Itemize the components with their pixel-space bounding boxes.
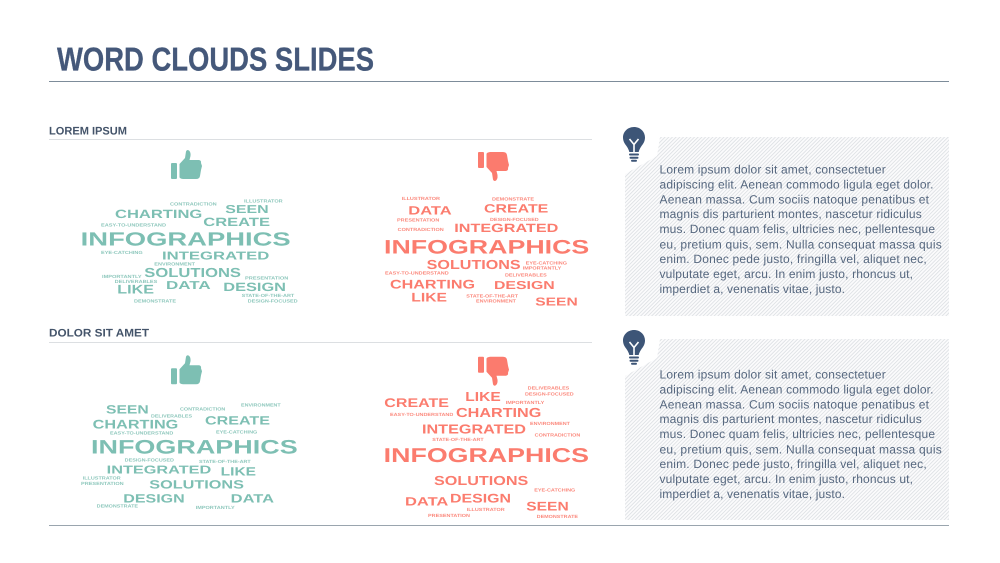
icon: thumbs up bottom — [171, 355, 202, 384]
word cloud: teal top: INTEGRATED — [162, 251, 269, 263]
panel: top note background — [625, 137, 949, 316]
word cloud: coral top: ENVIRONMENT — [476, 299, 516, 304]
word cloud: teal top: ENVIRONMENT — [154, 262, 195, 267]
word cloud: teal bottom: DELIVERABLES — [151, 414, 192, 419]
word cloud: coral bottom: DELIVERABLES — [528, 386, 569, 391]
text block: bottom note: vulputate eget, arcu. In enim justo, rhoncus ut, — [660, 472, 913, 486]
word cloud: coral bottom: PRESENTATION — [428, 513, 470, 518]
title: WORD CLOUDS SLIDES — [57, 40, 374, 78]
word cloud: teal top: DATA — [166, 280, 211, 292]
word cloud: teal top — [81, 198, 299, 304]
word cloud: teal top: DEMONSTRATE — [134, 299, 176, 304]
word cloud: teal bottom: DESIGN-FOCUSED — [125, 457, 175, 462]
word cloud: teal top: SEEN — [225, 204, 269, 216]
text block: top note: imperdiet a, venenatis vitae, justo. — [660, 282, 845, 296]
word cloud: coral bottom: SEEN — [526, 499, 569, 513]
word cloud: teal top: CREATE — [203, 215, 270, 229]
word cloud: teal top: DELIVERABLES — [115, 279, 157, 284]
word cloud: teal bottom: IMPORTANTLY — [196, 505, 235, 510]
word cloud: coral bottom: CHARTING — [456, 405, 541, 420]
word cloud: teal bottom — [81, 402, 298, 510]
heading: lorem ipsum: LOREM IPSUM — [49, 126, 127, 138]
text block: top note: Lorem ipsum dolor sit amet, consectetuer — [660, 162, 886, 176]
text block: bottom note: enim. Donec pede justo, fringilla vel, aliquet nec, — [660, 457, 927, 471]
word cloud: coral top: CONTRADICTION — [398, 227, 444, 232]
word cloud: coral bottom: LIKE — [465, 389, 501, 404]
word cloud: teal bottom: STATE-OF-THE-ART — [199, 459, 251, 464]
word cloud: coral bottom: ILLUSTRATOR — [467, 507, 506, 512]
word cloud: teal bottom: INFOGRAPHICS — [91, 437, 298, 459]
word cloud: coral bottom: IMPORTANTLY — [506, 400, 544, 405]
word cloud: coral top: LIKE — [411, 291, 447, 305]
word cloud: teal top: CHARTING — [115, 207, 202, 221]
word cloud: teal bottom: CHARTING — [93, 417, 178, 431]
word cloud: coral bottom: EASY-TO-UNDERSTAND — [390, 412, 454, 417]
text block: bottom note: imperdiet a, venenatis vitae, justo. — [660, 487, 845, 501]
word cloud: teal bottom: PRESENTATION — [81, 481, 124, 486]
word cloud: teal bottom: INTEGRATED — [107, 465, 211, 477]
text block: top note: magnis dis parturient montes, nascetur ridiculus — [660, 207, 922, 221]
word cloud: coral top: SOLUTIONS — [427, 257, 521, 272]
word cloud: teal top: DESIGN — [223, 280, 286, 294]
text block: bottom note: Aenean massa. Cum sociis natoque penatibus et — [660, 397, 930, 411]
icon: thumbs down top — [478, 152, 509, 181]
word cloud: coral top: DESIGN — [494, 280, 555, 292]
word cloud: teal top: LIKE — [117, 283, 154, 297]
word cloud: teal top: EASY-TO-UNDERSTAND — [101, 223, 167, 228]
word cloud: coral top: INFOGRAPHICS — [384, 237, 589, 259]
word cloud: teal bottom: DATA — [231, 491, 274, 505]
word cloud: coral top: PRESENTATION — [397, 217, 439, 222]
text block: bottom note: Lorem ipsum dolor sit amet, consectetuer — [660, 367, 886, 381]
word cloud: coral top: IMPORTANTLY — [523, 265, 561, 270]
text block: bottom note: eu, pretium quis, sem. Nulla consequat massa quis — [660, 442, 942, 456]
word cloud: coral top — [384, 196, 589, 309]
panel: bottom note background — [625, 339, 949, 520]
word cloud: coral top: CREATE — [484, 201, 548, 215]
word cloud: coral top: INTEGRATED — [454, 221, 559, 235]
text block: top note: vulputate eget, arcu. In enim justo, rhoncus ut, — [660, 267, 913, 281]
word cloud: coral bottom: DESIGN — [450, 492, 511, 506]
text block: bottom note — [660, 367, 942, 501]
word cloud: teal top: PRESENTATION — [245, 275, 288, 280]
word cloud: coral bottom: DATA — [405, 494, 449, 508]
word cloud: teal top: IMPORTANTLY — [102, 274, 142, 279]
word cloud: coral bottom: EYE-CATCHING — [534, 488, 576, 493]
word cloud: teal bottom: SOLUTIONS — [149, 477, 244, 491]
word cloud: teal top: EYE-CATCHING — [101, 250, 143, 255]
word cloud: coral top: DESIGN-FOCUSED — [490, 217, 540, 222]
word cloud: coral top: EASY-TO-UNDERSTAND — [385, 271, 450, 276]
word cloud: coral bottom: SOLUTIONS — [434, 473, 529, 488]
word cloud: coral top: EYE-CATCHING — [526, 260, 568, 265]
text block: top note: Aenean massa. Cum sociis natoque penatibus et — [660, 192, 930, 206]
word cloud: teal bottom: LIKE — [221, 464, 256, 478]
word cloud: coral bottom — [384, 386, 589, 519]
word cloud: teal top: STATE-OF-THE-ART — [242, 293, 295, 298]
text block: top note: enim. Donec pede justo, fringilla vel, aliquet nec, — [660, 252, 927, 266]
word cloud: teal bottom: EASY-TO-UNDERSTAND — [110, 430, 174, 435]
word cloud: teal bottom: DEMONSTRATE — [97, 504, 138, 509]
text block: top note: mus. Donec quam felis, ultricies nec, pellentesque — [660, 222, 935, 236]
heading: dolor sit amet: DOLOR SIT AMET — [49, 328, 149, 340]
word cloud: teal bottom: ENVIRONMENT — [241, 402, 281, 407]
word cloud: teal top: CONTRADICTION — [170, 202, 217, 207]
word cloud: coral top: DATA — [408, 204, 452, 218]
word cloud: coral bottom: INTEGRATED — [422, 422, 526, 437]
text block: bottom note: adipiscing elit. Aenean commodo ligula eget dolor. — [660, 382, 934, 396]
text block: bottom note: mus. Donec quam felis, ultricies nec, pellentesque — [660, 427, 935, 441]
word cloud: teal bottom: ILLUSTRATOR — [83, 475, 122, 480]
word cloud: teal top: INFOGRAPHICS — [81, 229, 291, 250]
icon: light bulb bottom — [623, 330, 645, 365]
word cloud: teal top: DESIGN-FOCUSED — [248, 299, 299, 304]
word cloud: teal bottom: DESIGN — [123, 491, 185, 505]
word cloud: teal top: ILLUSTRATOR — [244, 198, 284, 203]
word cloud: coral top: CHARTING — [390, 277, 475, 291]
icon: thumbs down bottom — [478, 357, 509, 386]
word cloud: coral bottom: INFOGRAPHICS — [384, 445, 589, 467]
word cloud: coral top: DELIVERABLES — [505, 272, 547, 277]
word cloud: coral top: ILLUSTRATOR — [402, 196, 441, 201]
icon: light bulb top — [623, 127, 645, 162]
word cloud: teal bottom: CREATE — [205, 414, 270, 428]
word cloud: teal bottom: CONTRADICTION — [180, 406, 225, 411]
word cloud: coral bottom: DESIGN-FOCUSED — [525, 392, 575, 397]
word cloud: coral bottom: CREATE — [384, 396, 449, 410]
text block: top note — [660, 162, 942, 296]
word cloud: teal top: SOLUTIONS — [144, 265, 241, 280]
word cloud: coral bottom: CONTRADICTION — [535, 432, 580, 437]
text block: top note: adipiscing elit. Aenean commodo ligula eget dolor. — [660, 177, 934, 191]
word cloud: coral bottom: STATE-OF-THE-ART — [432, 437, 484, 442]
word cloud: coral bottom: ENVIRONMENT — [530, 421, 570, 426]
word cloud: coral top: STATE-OF-THE-ART — [466, 293, 518, 298]
word cloud: coral top: DEMONSTRATE — [492, 197, 534, 202]
word cloud: teal bottom: EYE-CATCHING — [216, 430, 258, 435]
word cloud: teal bottom: SEEN — [106, 403, 149, 417]
word cloud: coral bottom: DEMONSTRATE — [537, 514, 578, 519]
icon: thumbs up top — [171, 150, 202, 179]
text block: bottom note: magnis dis parturient montes, nascetur ridiculus — [660, 412, 922, 426]
text block: top note: eu, pretium quis, sem. Nulla consequat massa quis — [660, 237, 942, 251]
word cloud: coral top: SEEN — [535, 297, 578, 309]
